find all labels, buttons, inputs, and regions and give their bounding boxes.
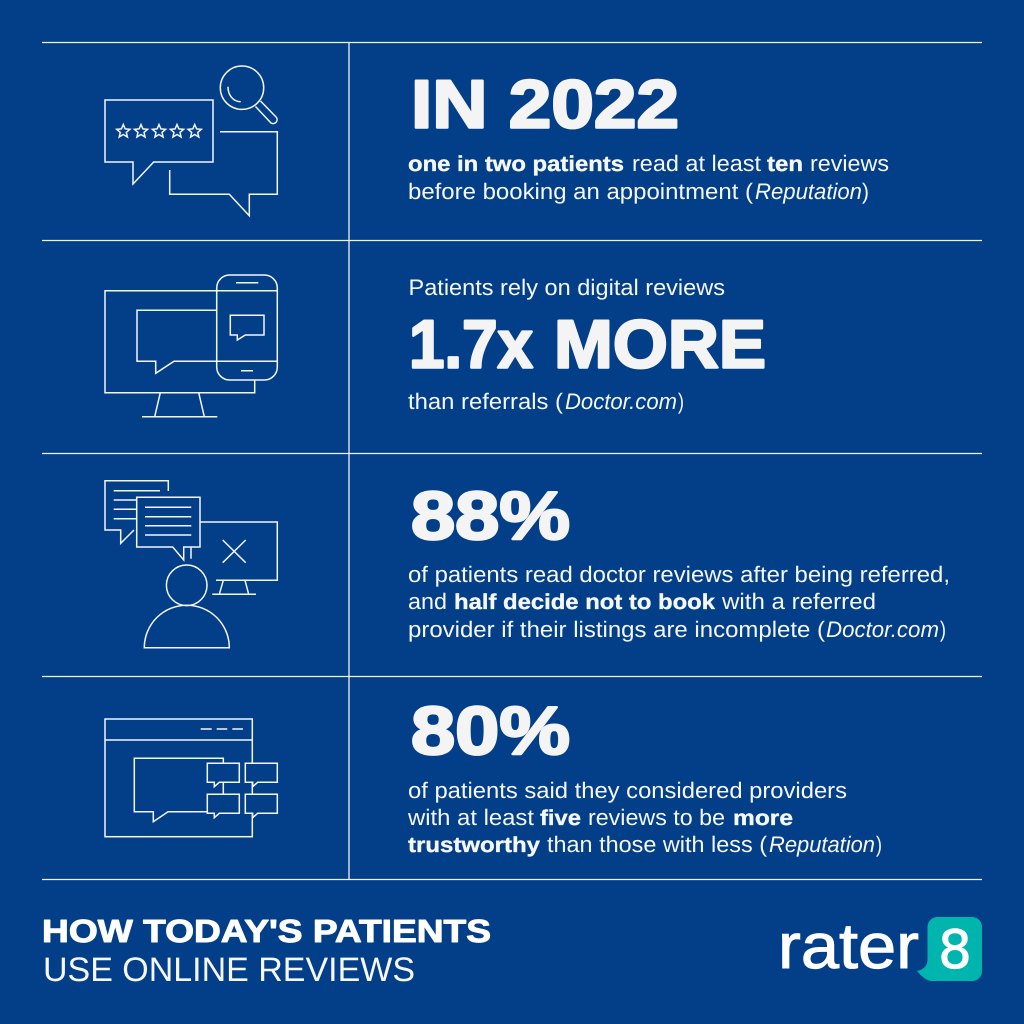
logo: rater8: 8 [938,920,972,981]
icon: browser window with chat bubbles [105,719,277,837]
stat: in 2022 [408,66,889,204]
stat: 88% [408,478,950,642]
title: HOW TODAY'S PATIENTS [42,913,491,949]
text: considered providers more trustworthy: than those with less ( [547,832,768,857]
text: than referrals [408,389,684,414]
icon: person with review bubbles and rejected monitor [105,481,277,648]
text: patients read doctor reviews: provider if their listings are incomplete ( [408,617,826,642]
text: considered providers more trustworthy: more [733,806,793,830]
text: patients rely on digital reviews: Patients rely on digital reviews [408,275,725,300]
text: one in two patients: before booking an appointment ( [408,179,754,204]
text: patients read doctor reviews: half decide not to book [454,590,715,614]
text: one in two patients: reviews [810,151,889,176]
heading: 1.7x MORE: MORE [554,306,766,382]
text: patients read doctor reviews: and [408,589,447,614]
text: one in two patients: one in two patients [408,152,624,176]
heading: 1.7x MORE: 1.7x [409,306,533,382]
text: one in two patients: ten [767,152,803,176]
text: than referrals: ) [678,389,684,414]
heading: IN 2022: IN 2022 [411,66,679,142]
text: considered providers more trustworthy: reviews to be [588,805,725,830]
text: patients read doctor reviews: of patients read doctor reviews after being referred, [408,562,950,587]
text: than referrals: Doctor.com [565,389,677,414]
text: patients read doctor reviews: ) [940,617,946,642]
text: one in two patients [408,151,889,204]
text: one in two patients: ) [862,179,869,204]
title [42,913,491,989]
icon: monitor and phone with chat bubbles [105,275,277,417]
heading: 88%: 88% [411,478,570,554]
text: patients read doctor reviews: Doctor.com [826,617,939,642]
text: one in two patients: Reputation [755,179,862,204]
title: USE ONLINE REVIEWS [43,951,415,989]
logo: rater8 [778,910,982,982]
text: considered providers more trustworthy [407,778,882,857]
stat: 1.7x more [408,275,766,414]
text: considered providers more trustworthy: of patients said they considered providers [408,778,847,803]
text: patients read doctor reviews [408,562,950,642]
text: considered providers more trustworthy: five [540,806,581,830]
text: patients read doctor reviews: with a referred [721,589,876,614]
text: considered providers more trustworthy: trustworthy [408,833,540,857]
text: considered providers more trustworthy: ) [876,832,882,857]
text: than referrals: than referrals ( [408,389,564,414]
icon: review bubbles with stars and magnifier [105,66,277,216]
stat: 80% [407,693,882,857]
text: considered providers more trustworthy: with at least [407,805,535,830]
text: one in two patients: read at least [632,151,762,176]
heading: 1.7x MORE [409,306,766,382]
text: considered providers more trustworthy: Reputation [769,832,875,857]
heading: 80%: 80% [411,693,570,769]
logo: rater8: rater [778,910,919,982]
